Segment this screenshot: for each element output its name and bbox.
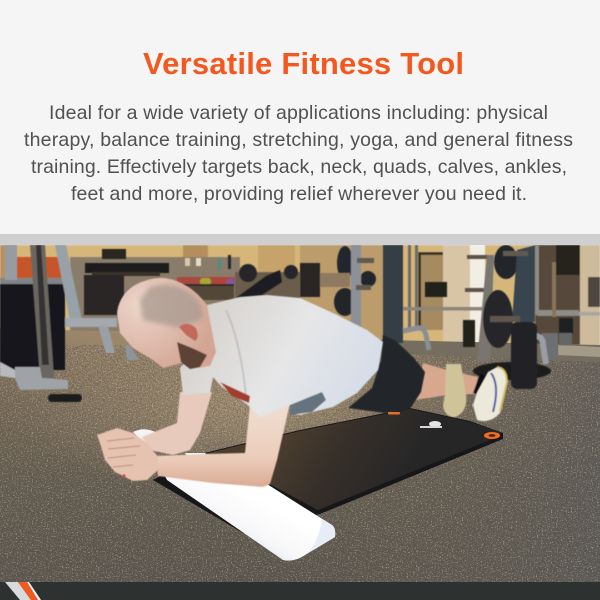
weight plates and machines, right of centre [300,245,483,350]
footer bar [0,582,600,600]
ear [179,324,198,341]
orange shorts accent [388,412,400,414]
hair stubble [140,285,204,328]
head [117,278,216,369]
header panel [0,0,600,234]
footer logo stripes [5,582,41,600]
floor [0,315,600,582]
orange grommet [484,432,500,439]
description text [24,102,573,205]
divider band [0,234,600,245]
description text: training. Effectively targets back, neck, quads, calves, ankles, [31,156,567,178]
left cable machine [0,245,139,402]
description text: Ideal for a wide variety of applications including: physical [49,102,548,124]
exercise mat [153,408,503,533]
squat rack with barbell plate [463,245,600,389]
shoes [443,364,507,421]
title: Versatile Fitness Tool [143,46,464,81]
grey t-shirt [180,295,383,417]
photo: plank on foam roller in gym [0,245,600,582]
gym background wall [0,245,600,355]
half foam roller [133,429,335,561]
shirt print [220,382,250,403]
clasped hands [97,428,158,481]
logo on mat [420,421,442,428]
near arm [155,403,290,487]
dumbbell racks and kettlebells [84,249,298,315]
far arm [142,392,212,455]
description text: feet and more, providing relief wherever you need it. [71,183,527,205]
shorts [348,335,425,413]
leg and sock [415,363,490,400]
description text: therapy, balance training, stretching, yoga, and general fitness [24,129,573,151]
beard [177,342,207,369]
